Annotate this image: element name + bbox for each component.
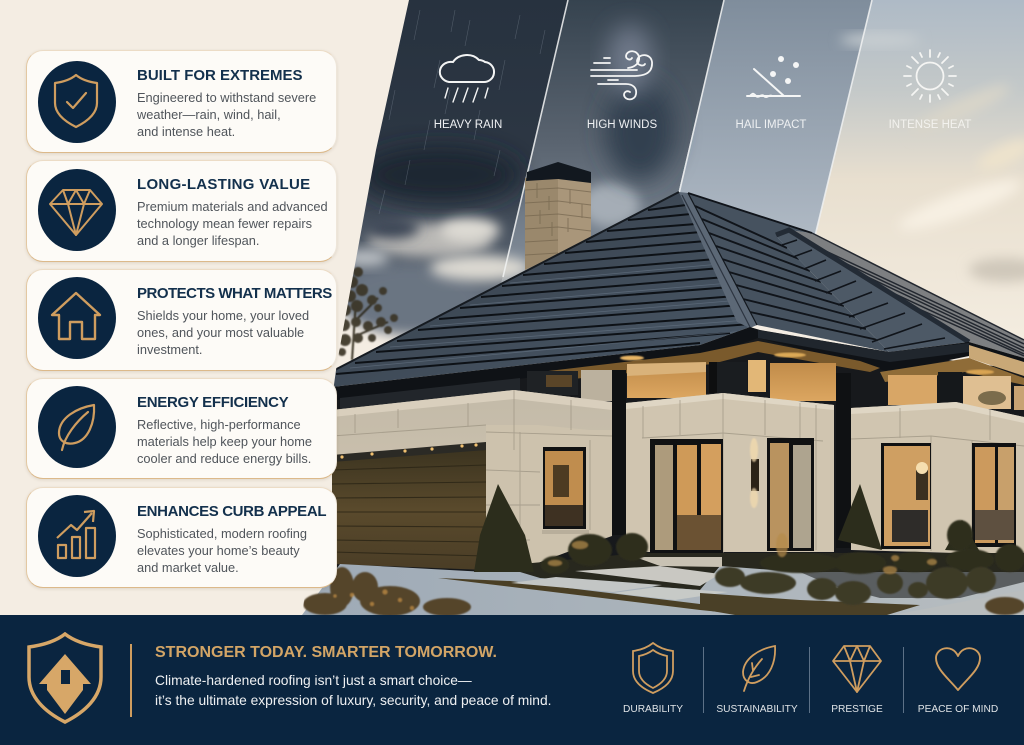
icon: house xyxy=(38,277,116,359)
body text: Engineered to withstand severe xyxy=(137,90,316,105)
label: heavy rain: HEAVY RAIN xyxy=(434,119,502,131)
body text: technology mean fewer repairs xyxy=(137,216,312,231)
icon: high winds xyxy=(590,50,653,100)
right wing dining window xyxy=(881,443,931,549)
label: hail impact: HAIL IMPACT xyxy=(736,119,806,131)
icon: diamond xyxy=(38,169,116,251)
wall sconce xyxy=(751,459,759,491)
body text: Premium materials and advanced xyxy=(137,199,328,214)
icon: leaf xyxy=(742,645,776,692)
card: enhances curb appeal xyxy=(26,487,337,588)
body text: ones, and your most valuable xyxy=(137,325,304,340)
label: intense heat: INTENSE HEAT xyxy=(889,119,971,131)
stone block: right wing xyxy=(851,402,1024,555)
dark structural columns xyxy=(612,370,626,535)
right wing corner window xyxy=(972,443,1016,547)
clouds xyxy=(340,25,1024,335)
sky panel: intense heat xyxy=(800,0,1024,360)
evergreen shrubs xyxy=(474,484,980,572)
body text: and market value. xyxy=(137,560,239,575)
label: DURABILITY xyxy=(623,704,683,715)
upper windows xyxy=(527,360,1024,410)
body text: elevates your home’s beauty xyxy=(137,543,300,558)
icon: diamond xyxy=(832,645,882,693)
label: high winds: HIGH WINDS xyxy=(587,119,657,131)
footer text xyxy=(155,673,551,708)
body text: and a longer lifespan. xyxy=(137,233,259,248)
footer text: it’s the ultimate expression of luxury, security, and peace of mind. xyxy=(155,693,551,708)
cream left panel with diagonal edge xyxy=(300,0,409,608)
value: durability xyxy=(623,642,683,715)
sky panel: heavy rain xyxy=(300,0,568,310)
tree behind the house xyxy=(338,267,398,360)
heading: BUILT FOR EXTREMES xyxy=(137,67,303,84)
body text: cooler and reduce energy bills. xyxy=(137,451,311,466)
rain streaks xyxy=(379,10,545,214)
stone block: garage wing xyxy=(332,390,612,575)
value: sustainability xyxy=(716,645,798,715)
paved ground xyxy=(302,553,1024,615)
body text: Shields your home, your loved xyxy=(137,308,309,323)
card: long-lasting value xyxy=(26,160,337,262)
sky panel: high winds xyxy=(495,0,724,310)
garage door xyxy=(332,450,486,570)
footer divider xyxy=(130,644,132,717)
icon: hail impact xyxy=(746,56,801,98)
roof: gable face xyxy=(776,230,969,352)
heading: ENERGY EFFICIENCY xyxy=(137,394,288,411)
roof: hip caps and ridge lines xyxy=(679,192,969,342)
panel: weather icons and labels xyxy=(434,49,972,131)
body text xyxy=(137,90,316,139)
card: energy efficiency xyxy=(26,378,337,479)
value divider xyxy=(903,647,904,713)
roof: far right face xyxy=(789,230,1024,358)
chimney xyxy=(525,162,591,270)
icon: heavy rain xyxy=(438,54,496,103)
icon: shield check xyxy=(38,61,116,143)
dark wall backing xyxy=(332,335,1024,575)
footer band xyxy=(0,615,1024,745)
value divider xyxy=(703,647,704,713)
icon: leaf xyxy=(38,386,116,468)
value: prestige xyxy=(831,645,883,715)
footer text: Climate-hardened roofing isn’t just a smart choice— xyxy=(155,673,472,688)
body text: weather—rain, wind, hail, xyxy=(137,107,281,122)
entry side window xyxy=(767,438,814,551)
icon: intense heat xyxy=(903,49,957,103)
label: PRESTIGE xyxy=(831,704,883,715)
body text: materials help keep your home xyxy=(137,434,312,449)
card: protects what matters xyxy=(26,269,337,371)
label: PEACE OF MIND xyxy=(918,704,998,715)
heading: PROTECTS WHAT MATTERS xyxy=(137,285,332,302)
card: built for extremes xyxy=(26,50,337,153)
landscaping bushes xyxy=(303,520,1024,616)
body text xyxy=(137,417,312,466)
footer heading: STRONGER TODAY. SMARTER TOMORROW. xyxy=(155,644,497,661)
value: peace of mind xyxy=(918,647,998,715)
garage wing window xyxy=(543,447,586,529)
roof: front-right hip face xyxy=(688,193,889,352)
icon: growth chart xyxy=(38,495,116,577)
roof: main left face xyxy=(325,192,751,387)
value divider xyxy=(809,647,810,713)
icon: shield xyxy=(632,642,674,694)
icon: shield with house xyxy=(27,632,103,724)
body text: Sophisticated, modern roofing xyxy=(137,526,307,541)
soffit with warm downlights xyxy=(340,341,1024,412)
entry french door xyxy=(650,439,723,555)
body text xyxy=(137,199,328,248)
panel divider lines xyxy=(503,0,872,277)
body text: investment. xyxy=(137,342,202,357)
roof: fascia and gutters xyxy=(325,327,1024,400)
body text: and intense heat. xyxy=(137,124,235,139)
body text: Reflective, high-performance xyxy=(137,417,301,432)
label: SUSTAINABILITY xyxy=(716,704,798,715)
stone block: entry xyxy=(626,393,834,555)
body text xyxy=(137,526,307,575)
sky panel: hail impact xyxy=(660,0,872,300)
photo scene: house under changing sky xyxy=(302,0,1024,615)
body text xyxy=(137,308,309,357)
heading: ENHANCES CURB APPEAL xyxy=(137,503,326,520)
icon: heart xyxy=(935,647,981,691)
heading: LONG-LASTING VALUE xyxy=(137,176,310,193)
